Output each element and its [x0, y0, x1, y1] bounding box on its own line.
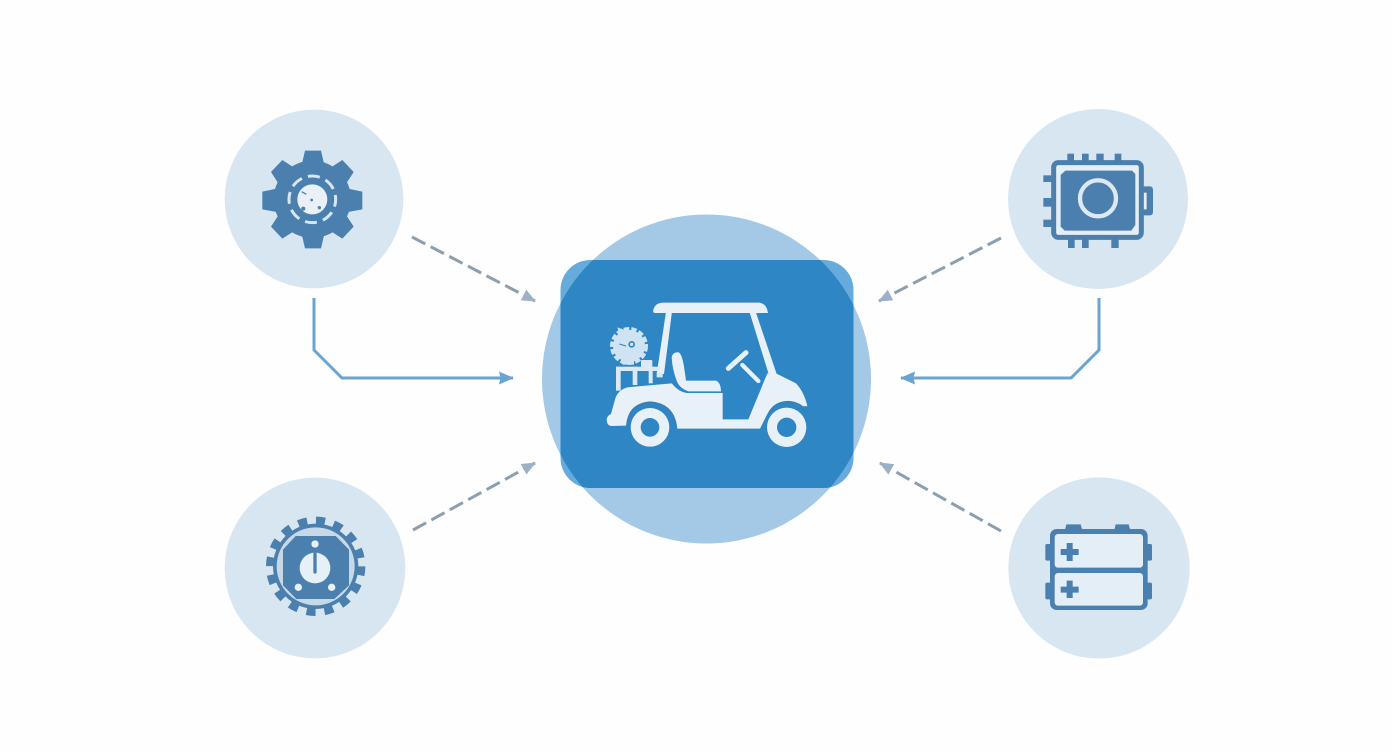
- arrow: chip to hub solid: [901, 298, 1099, 378]
- component: processor chip: [1008, 109, 1188, 289]
- arrow: knob to hub dashed: [413, 463, 535, 530]
- arrow: gear to hub solid: [314, 298, 513, 378]
- arrow: battery to hub dashed: [880, 463, 1001, 531]
- hub rounded panel: [560, 260, 854, 488]
- node circle: [225, 110, 403, 288]
- node circle: [225, 478, 405, 658]
- arrow: gear to hub dashed: [412, 237, 535, 301]
- icon: battery: [1045, 524, 1152, 610]
- icon: golf cart: [607, 303, 807, 447]
- diagram: golf cart surrounded by four component icons: [224, 109, 1190, 659]
- component: power control knob: [225, 478, 405, 658]
- icon: cog: [262, 151, 362, 248]
- hub circle: [542, 214, 871, 544]
- node circle: [1008, 109, 1188, 289]
- component: battery pack: [1008, 477, 1190, 659]
- node circle: [1008, 477, 1190, 659]
- icon: chip: [1043, 154, 1153, 248]
- central hub: golf cart: [542, 214, 871, 544]
- icon: power gear: [270, 521, 361, 612]
- component: gear: [225, 110, 403, 288]
- arrow: chip to hub dashed: [879, 238, 1001, 301]
- engine rack: [616, 360, 663, 391]
- fan blade: [612, 327, 646, 365]
